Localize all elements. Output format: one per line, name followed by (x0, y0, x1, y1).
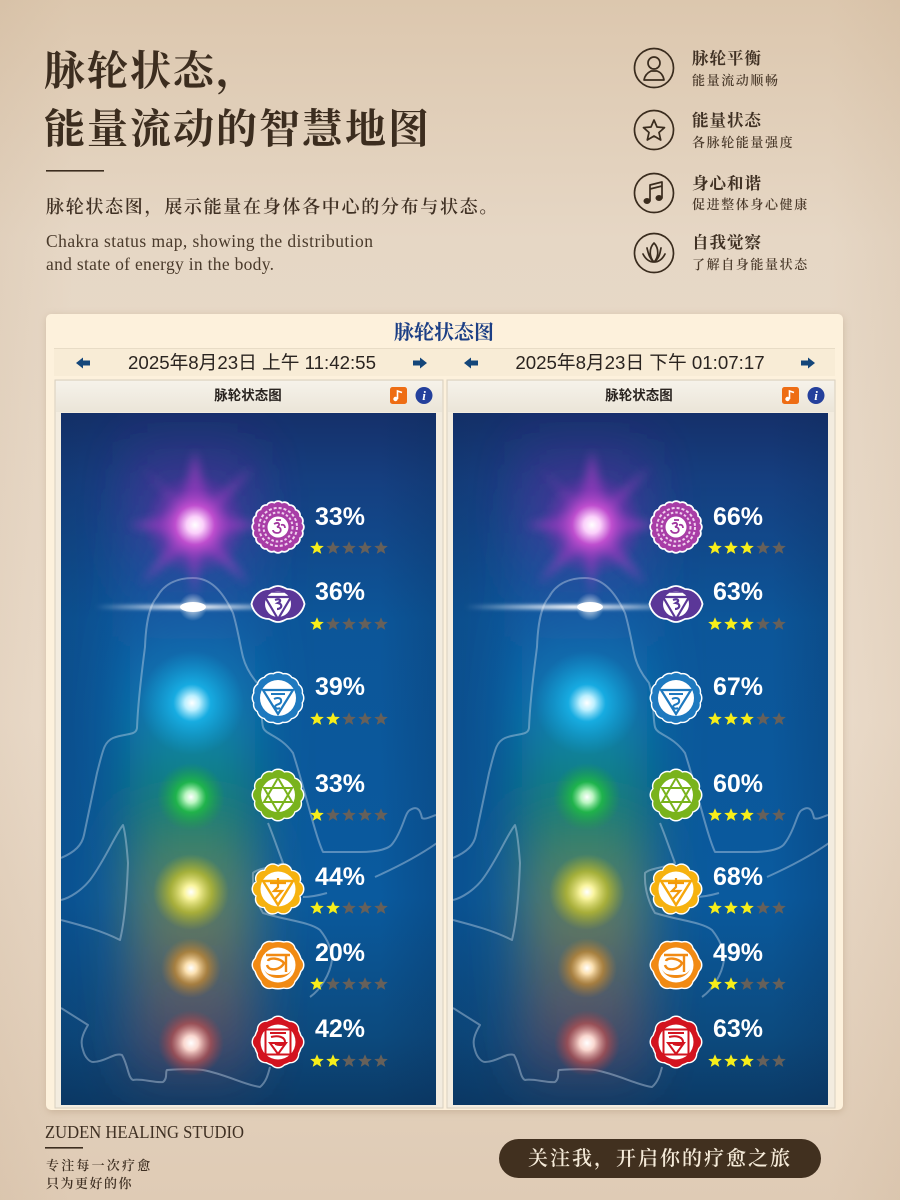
chakra glows (95, 450, 290, 1076)
feature: energy state: 各脉轮能量强度 (692, 135, 794, 150)
chart: left chakra map (61, 413, 437, 1105)
right panel heading: 脉轮状态图 (605, 387, 673, 403)
feature: energy state (634, 110, 794, 150)
subtitle english: Chakra status map, showing the distribution (46, 231, 373, 251)
feature: harmony: 促进整体身心健康 (692, 197, 809, 212)
row: root 42%: 42% (315, 1015, 365, 1043)
chart: right chakra map (453, 413, 829, 1105)
date bar (54, 349, 835, 376)
title (44, 48, 431, 152)
subtitle chinese: 脉轮状态图，展示能量在身体各中心的分布与状态。 (46, 196, 499, 218)
subtitle english (46, 231, 373, 274)
row: heart 33% (260, 770, 388, 821)
call to action button: 关注我，开启你的疗愈之旅 (528, 1147, 792, 1170)
row: heart 60%: 60% (713, 770, 763, 798)
icon: info (808, 387, 824, 404)
call to action button (499, 1139, 821, 1178)
row: heart 33%: 33% (315, 770, 365, 798)
row: root 42% (254, 1015, 388, 1067)
row: throat 67%: 67% (713, 673, 763, 701)
row: third eye 63% (650, 578, 786, 630)
feature: chakra balance (634, 48, 780, 88)
icon: music (390, 387, 407, 404)
footer: studio (45, 1122, 244, 1191)
row: throat 67% (658, 673, 786, 725)
feature: chakra balance: 脉轮平衡 (692, 48, 762, 68)
panel: chakra status card (46, 314, 843, 1112)
subtitle english: and state of energy in the body. (46, 254, 274, 274)
row: crown 66%: 66% (713, 503, 763, 531)
row: third eye 63%: 63% (713, 578, 763, 606)
feature list (634, 48, 809, 272)
row: sacral 20%: 20% (315, 939, 365, 967)
footer: studio: 只为更好的你 (46, 1176, 133, 1191)
feature: self awareness: 了解自身能量状态 (692, 257, 809, 272)
card heading: 脉轮状态图 (394, 321, 494, 344)
row: solar plexus 44%: 44% (315, 863, 365, 891)
chakra glows (465, 450, 685, 1076)
icon: info: i (814, 388, 818, 403)
left panel frame (55, 380, 443, 1108)
feature: self awareness: 自我觉察 (692, 232, 762, 252)
arrows (76, 358, 815, 368)
row: throat 39% (260, 673, 388, 725)
row: solar plexus 68%: 68% (713, 863, 763, 891)
row: solar plexus 68% (658, 863, 786, 914)
feature: harmony (634, 174, 809, 212)
row: root 63%: 63% (713, 1015, 763, 1043)
row: root 63% (652, 1015, 786, 1067)
row: solar plexus 44% (260, 863, 388, 914)
row: crown 66% (655, 503, 786, 554)
left date: 2025年8月23日 上午 11:42:55 (128, 352, 376, 373)
row: crown 33%: 33% (315, 503, 365, 531)
row: sacral 20% (254, 939, 388, 990)
footer: studio: 专注每一次疗愈 (46, 1158, 152, 1173)
feature: energy state: 能量状态 (692, 110, 762, 130)
feature: self awareness (634, 232, 809, 272)
row: heart 60% (658, 770, 786, 821)
footer: studio: ZUDEN HEALING STUDIO (45, 1122, 244, 1142)
row: third eye 36% (252, 578, 388, 630)
title: 脉轮状态， (44, 48, 259, 95)
right date: 2025年8月23日 下午 01:07:17 (515, 352, 765, 373)
row: crown 33% (257, 503, 388, 554)
right panel frame (447, 380, 835, 1108)
icon: info: i (422, 388, 426, 403)
row: throat 39%: 39% (315, 673, 365, 701)
feature: chakra balance: 能量流动顺畅 (692, 73, 780, 88)
left panel heading: 脉轮状态图 (214, 387, 282, 403)
row: sacral 49%: 49% (713, 939, 763, 967)
row: third eye 36%: 36% (315, 578, 365, 606)
feature: harmony: 身心和谐 (692, 174, 762, 193)
row: sacral 49% (652, 939, 786, 990)
icon: music (782, 387, 799, 404)
icon: info (416, 387, 432, 404)
title: 能量流动的智慧地图 (44, 106, 431, 152)
